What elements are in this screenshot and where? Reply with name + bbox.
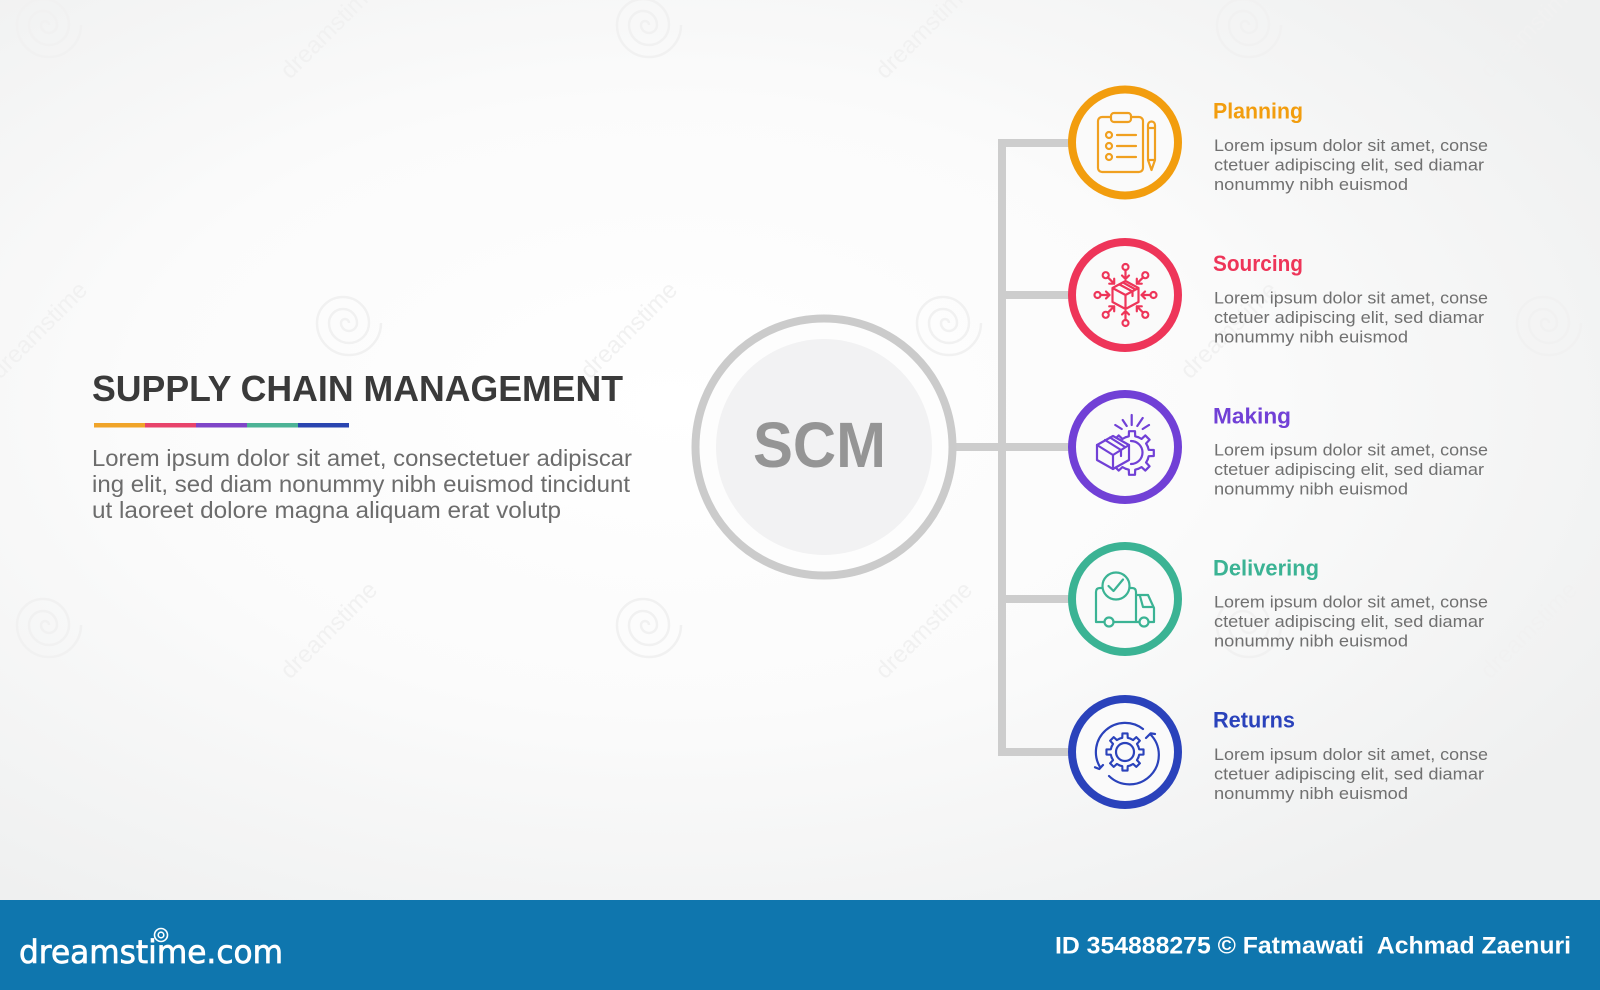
intro paragraph: ing elit, sed diam nonummy nibh euismod tincidunt <box>92 471 631 497</box>
step: Planning <box>1072 90 1488 196</box>
icon: delivery truck with check <box>1096 572 1154 626</box>
description: nonummy nibh euismod <box>1214 632 1408 650</box>
icon: gear with circular arrows <box>1095 723 1159 784</box>
description: Lorem ipsum dolor sit amet, conse <box>1214 136 1488 155</box>
watermark pattern <box>0 0 1583 684</box>
heading: Delivering <box>1213 556 1319 580</box>
heading: Returns <box>1213 708 1295 732</box>
description: ctetuer adipiscing elit, sed diamar <box>1214 460 1484 479</box>
description: Lorem ipsum dolor sit amet, conse <box>1214 288 1488 308</box>
description <box>1214 592 1488 650</box>
logo spiral <box>154 928 168 942</box>
step: Delivering <box>1072 546 1488 652</box>
image credit: ID 354888275 © Fatmawati Achmad Zaenuri <box>1055 932 1571 960</box>
description: ctetuer adipiscing elit, sed diamar <box>1214 308 1484 327</box>
description: nonummy nibh euismod <box>1214 784 1408 803</box>
logo text: dreamstime.com <box>19 933 283 971</box>
intro paragraph: Lorem ipsum dolor sit amet, consectetuer adipiscar <box>92 445 632 471</box>
description: nonummy nibh euismod <box>1214 480 1408 498</box>
heading: Sourcing <box>1213 251 1303 276</box>
title: SUPPLY CHAIN MANAGEMENT <box>92 368 623 409</box>
watermark pattern: dreamstime <box>275 576 383 684</box>
central SCM hub <box>696 318 952 576</box>
description <box>1214 440 1488 498</box>
description <box>1214 288 1488 346</box>
description <box>1214 136 1488 194</box>
hub label: SCM <box>753 409 886 481</box>
description: ctetuer adipiscing elit, sed diamar <box>1214 156 1484 174</box>
icon: box with inbound arrows <box>1094 264 1156 326</box>
step: Returns <box>1072 699 1488 805</box>
footer bar <box>0 900 1600 990</box>
description: Lorem ipsum dolor sit amet, conse <box>1214 592 1488 612</box>
title underline: colour bar <box>94 423 349 428</box>
icon: clipboard and pencil <box>1098 113 1155 172</box>
watermark pattern: dreamstime <box>1475 576 1583 684</box>
connector tree <box>955 139 1070 756</box>
watermark pattern: dreamstime <box>1175 276 1283 384</box>
intro paragraph: ut laoreet dolore magna aliquam erat volutp <box>92 497 561 523</box>
icon: box, gear and rays <box>1097 415 1154 475</box>
description: nonummy nibh euismod <box>1214 175 1408 194</box>
description: nonummy nibh euismod <box>1214 328 1408 346</box>
description: Lorem ipsum dolor sit amet, conse <box>1214 745 1488 764</box>
description: ctetuer adipiscing elit, sed diamar <box>1214 764 1484 784</box>
intro paragraph <box>92 445 632 523</box>
description <box>1214 745 1488 803</box>
watermark pattern: dreamstime <box>575 276 683 384</box>
watermark pattern: dreamstime <box>870 576 978 684</box>
heading: Planning <box>1213 98 1303 124</box>
step: Sourcing <box>1072 242 1488 348</box>
step: Making <box>1072 394 1488 500</box>
heading: Making <box>1213 404 1291 428</box>
description: Lorem ipsum dolor sit amet, conse <box>1214 440 1488 460</box>
description: ctetuer adipiscing elit, sed diamar <box>1214 612 1484 631</box>
